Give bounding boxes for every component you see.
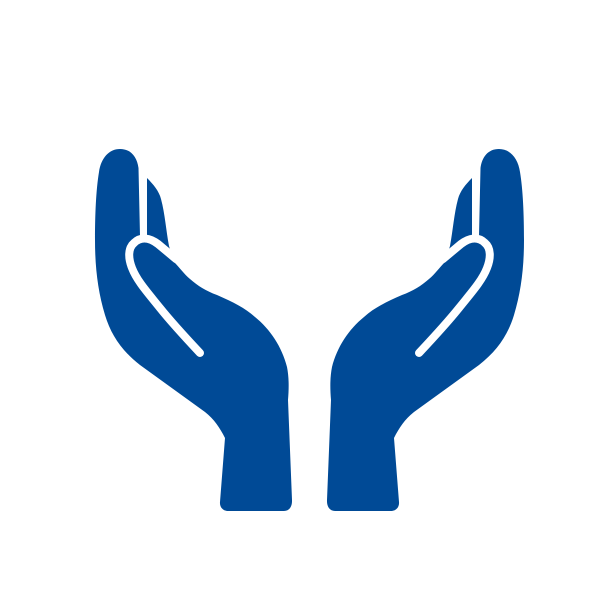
right hand (327, 149, 524, 511)
left hand (95, 149, 292, 511)
